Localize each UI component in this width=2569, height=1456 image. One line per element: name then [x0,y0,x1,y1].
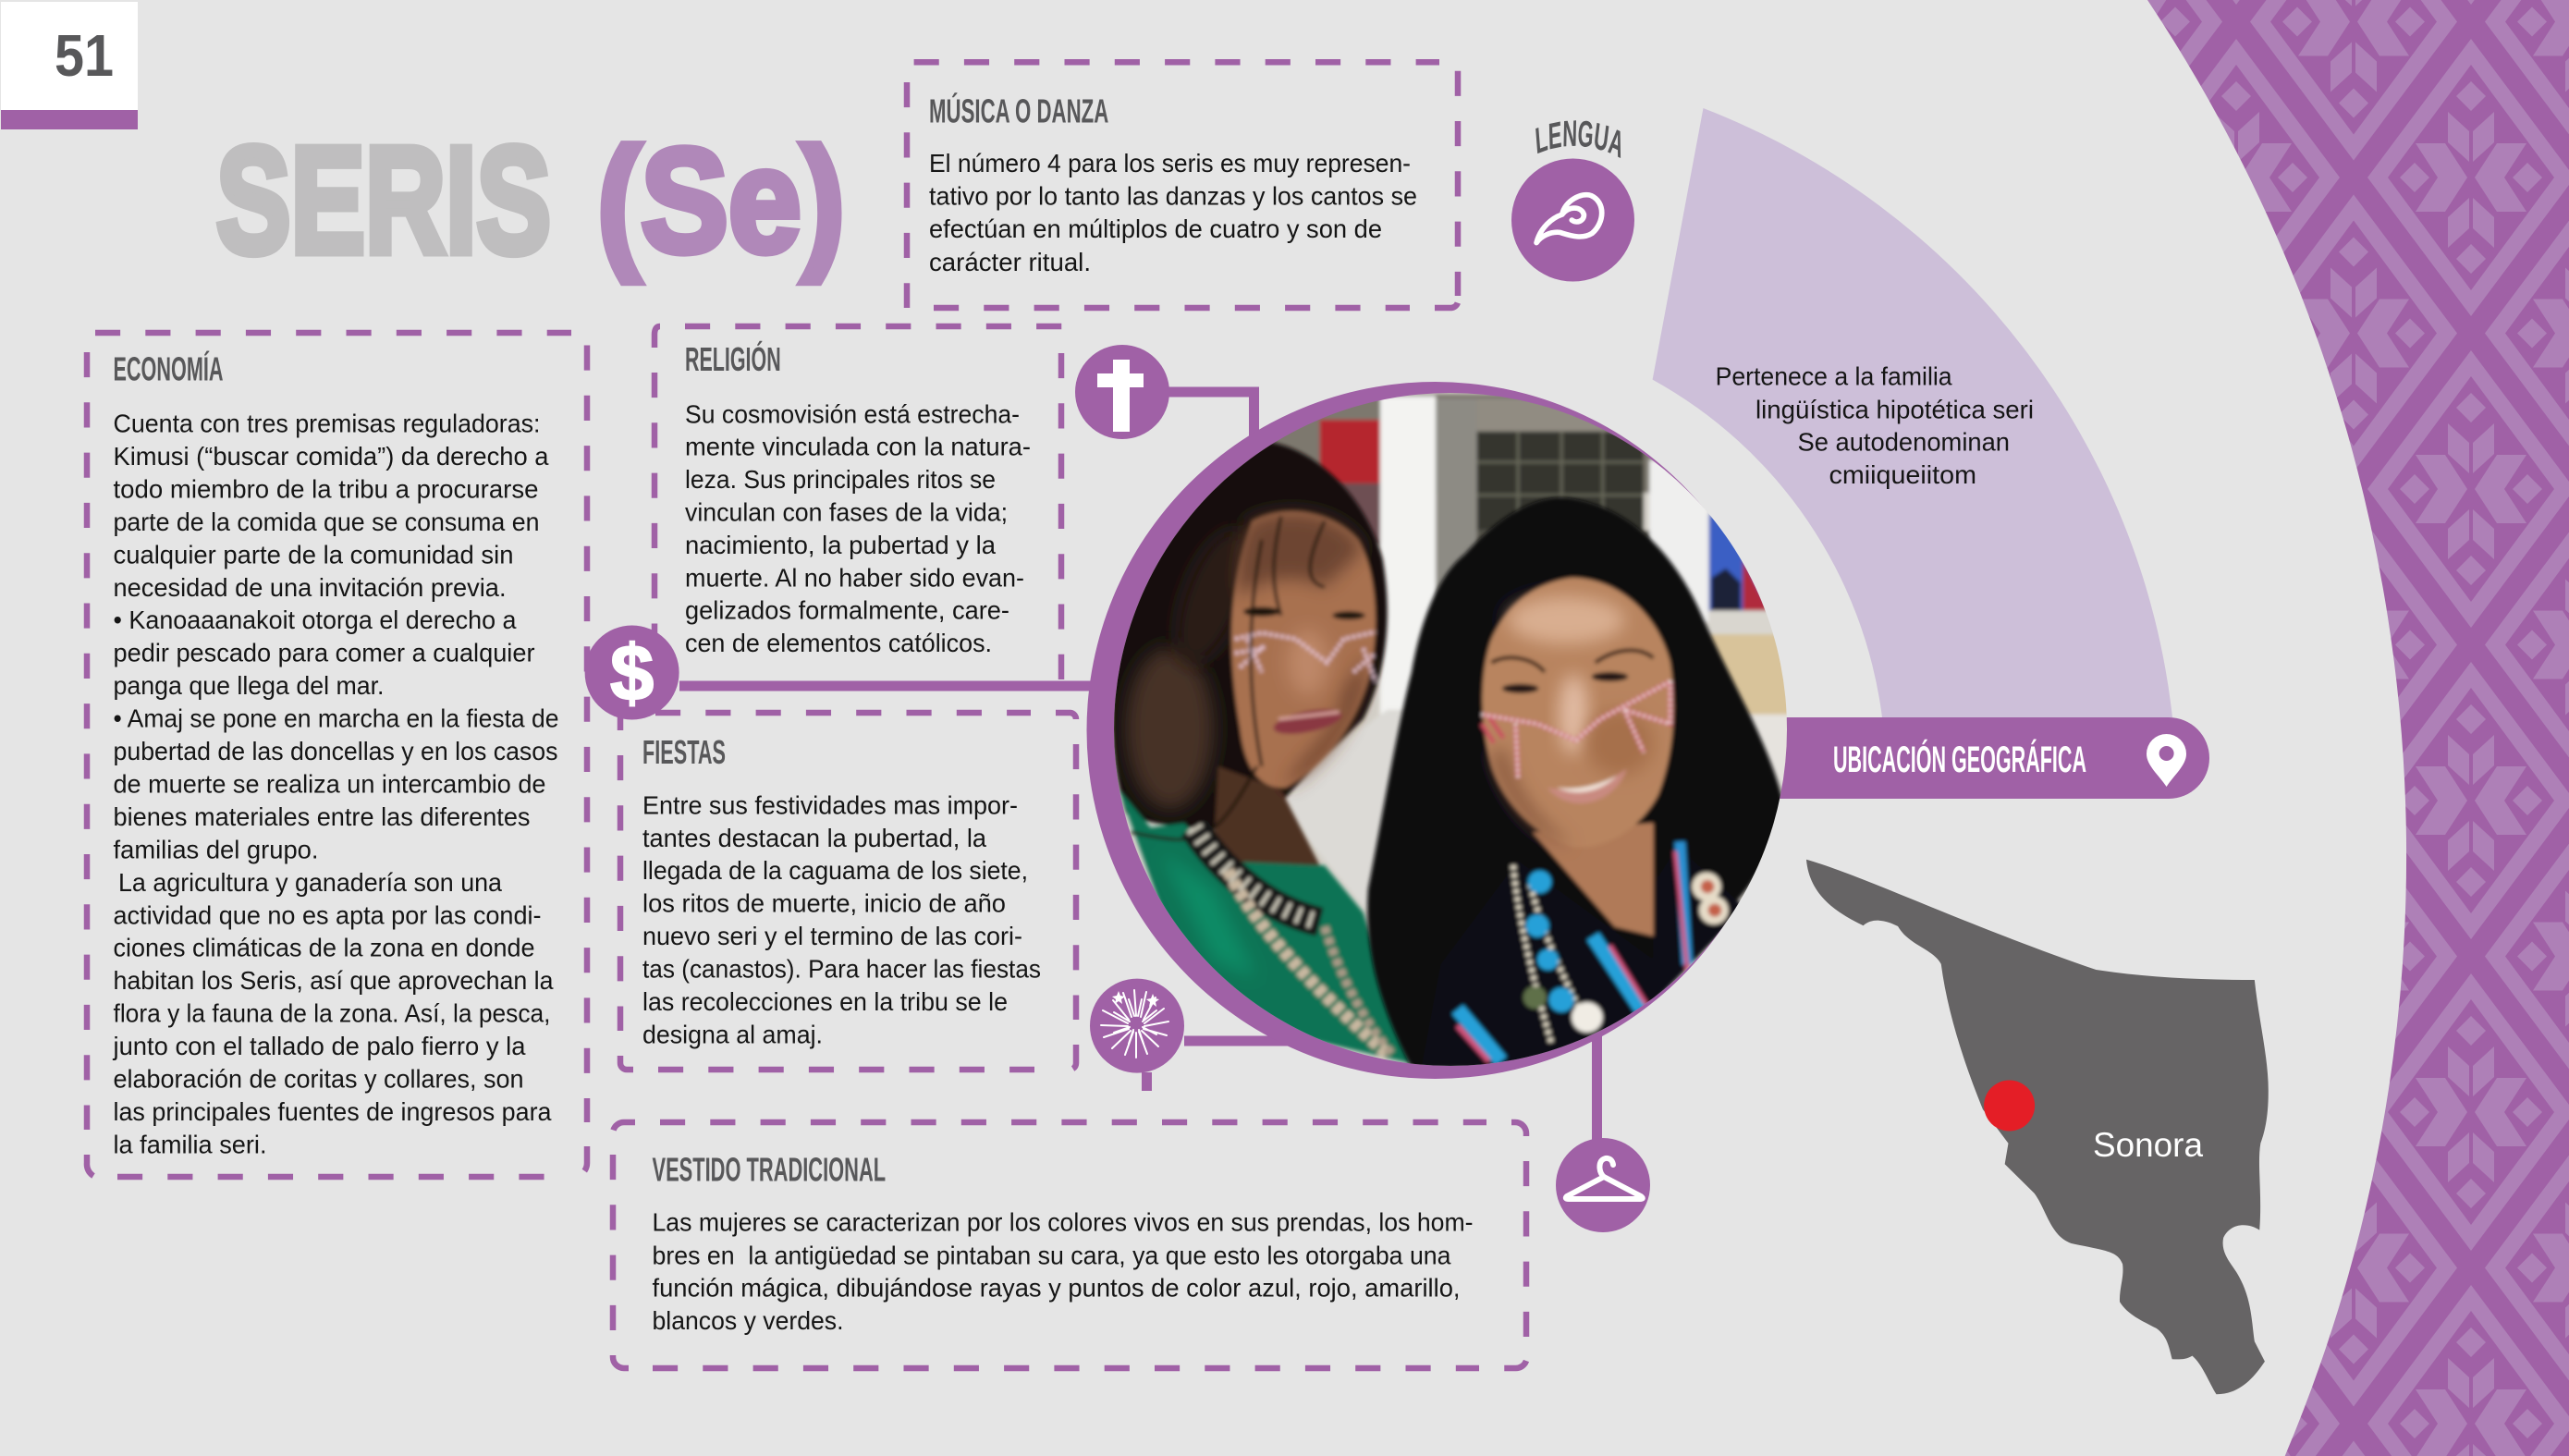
panel: economía: • Amaj se pone en marcha en la fiesta de [113,704,558,733]
woven purple pattern band [2147,0,2569,1456]
icon: dollar (economía): $ [610,630,654,717]
panel: fiestas: tantes destacan la pubertad, la [642,824,986,852]
panel: música o danza: efectúan en múltiplos de cuatro y son de [929,214,1382,243]
panel: fiestas: Entre sus festividades mas impor- [642,790,1018,819]
panel: economía: habitan los Seris, así que aprovechan la [113,966,554,995]
panel: economía: junto con el tallado de palo fierro y la [113,1032,526,1060]
panel: vestido tradicional: bres en la antigüedad se pintaban su cara, ya que esto les otorgaba una [653,1242,1451,1270]
panel: música o danza: carácter ritual. [929,248,1091,276]
panel: economía: elaboración de coritas y collares, son [113,1065,523,1093]
banner: ubicación geográfica [1747,717,2209,799]
panel: economía: La agricultura y ganadería son una [118,868,502,897]
title: (Se) [597,117,845,283]
panel: economía: actividad que no es apta por las condi- [113,900,542,929]
panel: economía: todo miembro de la tribu a procurarse [113,474,538,503]
panel: economía: parte de la comida que se consuma en [113,508,540,536]
panel: vestido tradicional [613,1122,1526,1368]
panel: economía: Cuenta con tres premisas reguladoras: [113,409,540,438]
panel: fiestas: las recolecciones en la tribu se le [642,987,1008,1016]
panel: religión: gelizados formalmente, care- [685,596,1009,625]
icon: fireworks (fiestas) [1090,979,1184,1073]
icon: dollar (economía) [585,625,679,719]
panel: religión: mente vinculada con la natura- [685,433,1031,461]
panel: economía: ciones climáticas de la zona en donde [113,934,534,962]
panel: economía: pedir pescado para comer a cualquier [113,639,534,667]
map: Sonora: Sonora [2093,1126,2203,1164]
panel: fiestas: FIESTAS [642,733,726,771]
panel: lengua arc: Pertenece a la familia [1716,362,1952,391]
panel: religión: Su cosmovisión está estrecha- [685,399,1020,428]
panel: religión [654,326,1062,687]
panel: fiestas: los ritos de muerte, inicio de año [642,889,1006,918]
panel: religión: cen de elementos católicos. [685,629,992,657]
panel: vestido tradicional: Las mujeres se caracterizan por los colores vivos en sus prendas, los hom- [653,1208,1474,1237]
photo ring [1087,382,1784,1079]
panel: religión: nacimiento, la pubertad y la [685,531,996,559]
panel: economía: las principales fuentes de ingresos para [113,1097,552,1126]
panel: lengua arc: Se autodenominan [1797,427,2010,457]
panel: música o danza: tativo por lo tanto las danzas y los cantos se [929,182,1417,211]
panel: economía [87,333,587,1177]
panel: religión: vinculan con fases de la vida; [685,497,1008,527]
panel: lengua arc: cmiiqueiitom [1829,460,1976,489]
banner: ubicación geográfica: UBICACIÓN GEOGRÁFICA [1833,738,2086,780]
panel: vestido tradicional: VESTIDO TRADICIONAL [653,1151,886,1189]
panel: economía: Kimusi (“buscar comida”) da derecho a [113,442,549,471]
connectors [679,392,1597,1146]
panel: religión: leza. Sus principales ritos se [685,465,996,494]
map: Sonora [1806,860,2269,1394]
panel: fiestas: designa al amaj. [642,1020,823,1048]
panel: economía: de muerte se realiza un intercambio de [113,769,545,799]
panel: economía: cualquier parte de la comunidad sin [113,540,514,569]
panel: religión: RELIGIÓN [685,339,781,378]
photo: two Seri women with face paint [1114,393,1787,1066]
icon: cross (religión) [1075,345,1169,439]
panel: fiestas: tas (canastos). Para hacer las fiestas [642,954,1041,983]
panel: economía: necesidad de una invitación previa. [113,573,507,602]
panel: religión: muerte. Al no haber sido evan- [685,563,1024,592]
panel: fiestas [620,705,1076,1070]
panel: lengua arc: lingüística hipotética seri [1755,395,2034,423]
panel: fiestas: nuevo seri y el termino de las cori- [642,922,1022,950]
panel: vestido tradicional: blancos y verdes. [653,1306,843,1335]
woman on the left [1112,441,1412,1063]
panel: economía: flora y la fauna de la zona. Así, la pesca, [113,999,551,1028]
panel: economía: la familia seri. [113,1130,266,1158]
title: SERIS [216,116,551,285]
panel: economía: pubertad de las doncellas y en los casos [113,737,558,765]
panel: economía: familias del grupo. [113,835,318,863]
panel: economía: • Kanoaaanakoit otorga el derecho a [113,606,517,634]
panel: música o danza: El número 4 para los seris es muy represen- [929,149,1411,177]
photo background: building [1114,393,1787,1066]
panel: vestido tradicional: función mágica, dibujándose rayas y puntos de color azul, rojo, amarillo, [653,1274,1461,1303]
label: lengua: LENGUA [1535,120,1621,158]
panel: economía: panga que llega del mar. [113,671,385,700]
panel: música o danza: MÚSICA O DANZA [929,92,1108,130]
icon: hanger (vestido) [1556,1138,1650,1232]
page number tab [1,2,138,129]
page number tab: 51 [55,22,114,89]
panel: fiestas: llegada de la caguama de los siete, [642,856,1028,885]
icon: lengua [1511,159,1634,281]
panel: economía: ECONOMÍA [113,349,224,387]
panel: música o danza [907,62,1458,308]
panel: economía: bienes materiales entre las diferentes [113,802,531,831]
woman on the right [1367,497,1784,1069]
panel: lengua arc [1653,108,2172,717]
